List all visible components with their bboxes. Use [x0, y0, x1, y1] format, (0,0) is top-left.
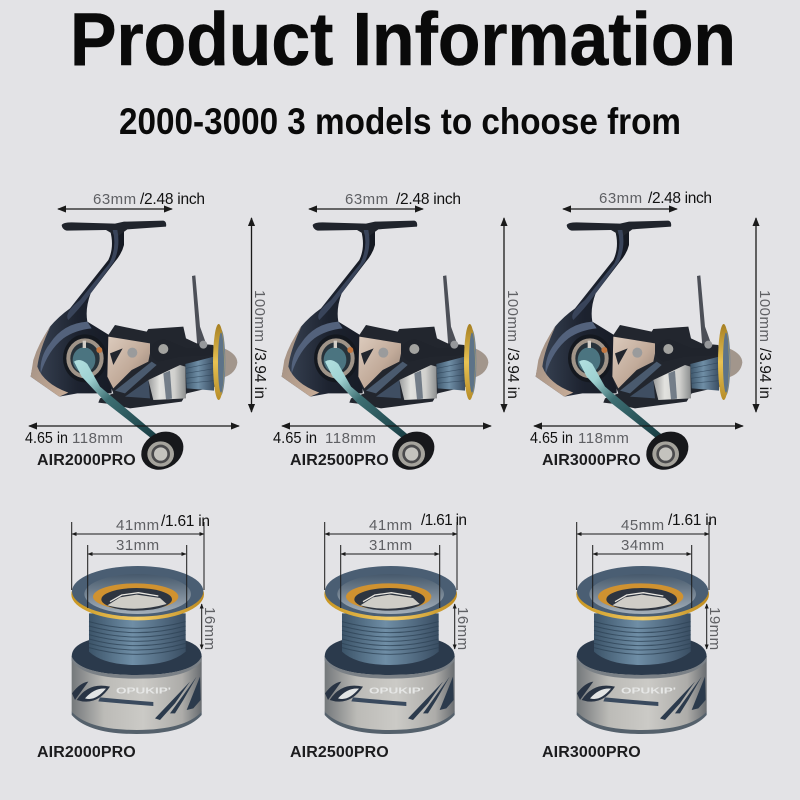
icon: reel illustration	[536, 221, 742, 477]
model name: AIR2500PRO	[290, 452, 389, 469]
outer diameter label: 41mm	[116, 517, 160, 534]
width label: /2.48 inch	[140, 191, 205, 208]
length label: 118mm	[325, 430, 376, 447]
depth label: 16mm	[201, 607, 218, 651]
diameter guides	[325, 522, 457, 608]
subtitle: 2000-3000 3 models to choose from	[119, 101, 681, 142]
outer diameter arrow	[577, 533, 709, 535]
inner diameter label: 31mm	[116, 537, 160, 554]
icon: spool illustration	[324, 566, 457, 734]
width label: /2.48 inch	[648, 190, 712, 207]
height dimension arrow	[503, 218, 505, 412]
inner diameter label: 31mm	[369, 537, 413, 554]
length label: 4.65 in	[273, 430, 317, 447]
height dimension arrow	[755, 218, 757, 412]
panel: AIR2500PRO reel dimensions	[273, 191, 521, 477]
width dimension arrow	[563, 208, 677, 210]
height label: /3.94 in	[504, 348, 521, 399]
height label: 100mm	[504, 290, 521, 343]
model name: AIR2000PRO	[37, 452, 136, 469]
diameter guides	[72, 522, 204, 608]
panel: AIR3000PRO spool dimensions	[542, 512, 723, 761]
depth label: 16mm	[454, 607, 471, 651]
inner diameter label: 34mm	[621, 537, 665, 554]
outer diameter label: 41mm	[369, 517, 413, 534]
length label: 118mm	[578, 430, 629, 447]
inner diameter arrow	[341, 553, 439, 555]
length dimension arrow	[282, 425, 491, 427]
icon: spool illustration	[576, 566, 709, 734]
panel: AIR2500PRO spool dimensions	[290, 512, 471, 761]
outer diameter label: /1.61 in	[161, 513, 210, 530]
width label: 63mm	[599, 190, 643, 207]
outer diameter label: /1.61 in	[421, 512, 467, 529]
length dimension arrow	[29, 425, 239, 427]
depth arrow	[201, 604, 203, 649]
height label: /3.94 in	[756, 348, 773, 399]
height label: 100mm	[251, 290, 268, 343]
icon: spool illustration	[71, 566, 204, 734]
height label: 100mm	[756, 290, 773, 343]
icon: reel illustration	[31, 221, 237, 477]
depth arrow	[706, 604, 708, 649]
outer diameter arrow	[72, 533, 204, 535]
width label: 63mm	[345, 191, 389, 208]
outer diameter arrow	[325, 533, 457, 535]
diameter guides	[577, 522, 709, 608]
depth arrow	[454, 604, 456, 649]
height label: /3.94 in	[251, 348, 268, 399]
length dimension arrow	[534, 425, 743, 427]
model name: AIR2000PRO	[37, 744, 136, 761]
width label: /2.48 inch	[396, 191, 461, 208]
panel: AIR2000PRO spool dimensions	[37, 513, 218, 761]
model name: AIR3000PRO	[542, 744, 641, 761]
width label: 63mm	[93, 191, 137, 208]
outer diameter label: 45mm	[621, 517, 665, 534]
length label: 4.65 in	[530, 430, 573, 447]
length label: 4.65 in	[25, 430, 68, 447]
panel: AIR3000PRO reel dimensions	[530, 190, 773, 477]
model name: AIR2500PRO	[290, 744, 389, 761]
width dimension arrow	[309, 208, 423, 210]
icon: reel illustration	[282, 221, 488, 477]
model name: AIR3000PRO	[542, 452, 641, 469]
width dimension arrow	[58, 208, 172, 210]
inner diameter arrow	[593, 553, 691, 555]
outer diameter label: /1.61 in	[668, 512, 717, 529]
height dimension arrow	[250, 218, 252, 412]
inner diameter arrow	[88, 553, 186, 555]
length label: 118mm	[72, 430, 123, 447]
depth label: 19mm	[706, 607, 723, 651]
panel: AIR2000PRO reel dimensions	[25, 191, 268, 477]
